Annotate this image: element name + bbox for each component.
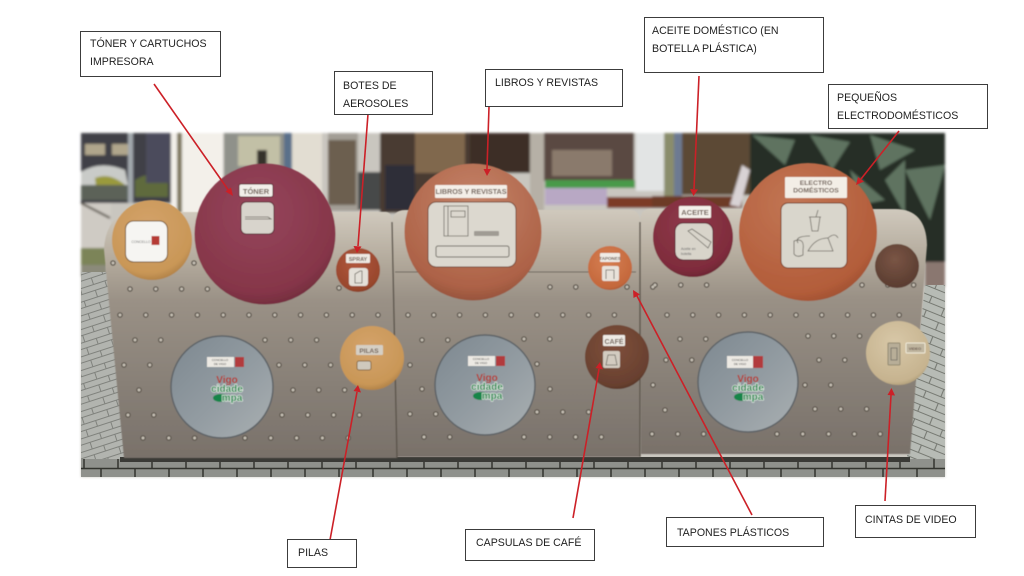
button: batteries: PILAS: [359, 348, 379, 355]
arrow: coffee capsules: [573, 362, 603, 518]
button: small appliances: DOMÉSTICOS: [793, 186, 839, 194]
window: centre: cidade: [471, 382, 503, 393]
panel: centre module: [392, 210, 640, 457]
label: batteries: PILAS: [298, 547, 328, 559]
button: spray: [336, 248, 380, 292]
button: council logo: CONCELLO: [131, 240, 151, 244]
window: left: Vigo: [216, 375, 238, 386]
window: left: DE VIGO: [214, 362, 227, 366]
arrow: batteries: [330, 385, 361, 540]
left paving: [81, 272, 128, 477]
label: aerosol cans: [334, 72, 432, 114]
window: right: CONCELLO: [732, 358, 749, 362]
button: plastic caps: TAPONES: [599, 256, 621, 261]
button: small appliances: [739, 163, 877, 301]
arrow: oil: [690, 76, 699, 196]
label: batteries: [288, 540, 356, 568]
label: books and magazines: LIBROS Y REVISTAS: [495, 77, 598, 89]
label: plastic caps: [666, 518, 824, 546]
label: domestic oil: BOTELLA PLÁSTICA): [652, 42, 757, 55]
arrow: toner: [154, 84, 233, 196]
button: plastic caps: [588, 246, 632, 290]
window: centre: [435, 335, 535, 435]
button: council logo: [112, 200, 192, 280]
window: right: cidade: [732, 383, 764, 394]
label: toner and printer cartridges: TÓNER Y CARTUCHOS: [90, 37, 207, 50]
label: video tapes: CINTAS DE VIDEO: [865, 514, 957, 526]
label: domestic oil: [644, 18, 824, 72]
label: toner and printer cartridges: IMPRESORA: [90, 56, 155, 68]
arrow: plastic caps: [633, 290, 752, 515]
label: aerosol cans: BOTES DE: [343, 80, 397, 92]
button: oil: ACEITE: [681, 208, 709, 217]
button: spray: SPRAY: [349, 257, 368, 263]
arrow: small appliances: [856, 131, 899, 185]
arrow: books: [484, 107, 491, 176]
button: books and magazines: [404, 164, 542, 300]
label: video tapes: [856, 506, 976, 538]
window: centre: mpa: [482, 391, 503, 402]
button: batteries: [340, 326, 404, 390]
panel: left module: [104, 212, 397, 458]
right paving: [905, 285, 945, 477]
button: coffee capsules: [585, 325, 649, 389]
panel: right module: [640, 209, 927, 454]
label: plastic caps: TAPONES PLÁSTICOS: [677, 526, 789, 539]
button: brown unlabelled: [875, 244, 919, 288]
button: oil: botella: [681, 252, 691, 256]
window: centre: DE VIGO: [475, 361, 488, 365]
button: oil: [653, 197, 733, 277]
button: toner: TÓNER: [243, 187, 270, 196]
label: toner and printer cartridges: [80, 32, 220, 76]
label: small appliances: [828, 84, 988, 128]
window: centre: CONCELLO: [473, 357, 490, 361]
label: domestic oil: ACEITE DOMÉSTICO (EN: [652, 24, 779, 37]
label: small appliances: PEQUEÑOS: [837, 91, 897, 104]
label: books and magazines: [486, 70, 622, 106]
window: centre: Vigo: [476, 373, 498, 384]
label: aerosol cans: AEROSOLES: [343, 98, 408, 110]
button: coffee capsules: CAFÉ: [604, 337, 624, 346]
arrow: aerosols: [354, 114, 368, 253]
label: coffee capsules: CAPSULAS DE CAFÉ: [476, 536, 581, 549]
label: small appliances: ELECTRODOMÉSTICOS: [837, 109, 958, 122]
window: right: mpa: [743, 392, 764, 403]
window: left: mpa: [222, 393, 243, 404]
window: right: DE VIGO: [734, 362, 747, 366]
window: left: CONCELLO: [212, 358, 229, 362]
button: video tapes: VIDEO: [909, 346, 921, 351]
button: toner: [194, 164, 336, 304]
window: left: [171, 336, 273, 438]
button: video tapes: [866, 321, 930, 385]
window: right: Vigo: [737, 374, 759, 385]
window: left: cidade: [211, 384, 243, 395]
button: small appliances: ELECTRO: [800, 180, 832, 187]
button: oil: Aceite en: [681, 247, 696, 251]
bottom paving: [81, 459, 945, 477]
arrow: video tapes: [885, 388, 895, 501]
window: right: [698, 332, 798, 432]
label: coffee capsules: [466, 530, 594, 560]
photograph of recycling container: [81, 133, 945, 477]
button: books and magazines: LIBROS Y REVISTAS: [435, 187, 507, 196]
rivets: [113, 263, 915, 438]
